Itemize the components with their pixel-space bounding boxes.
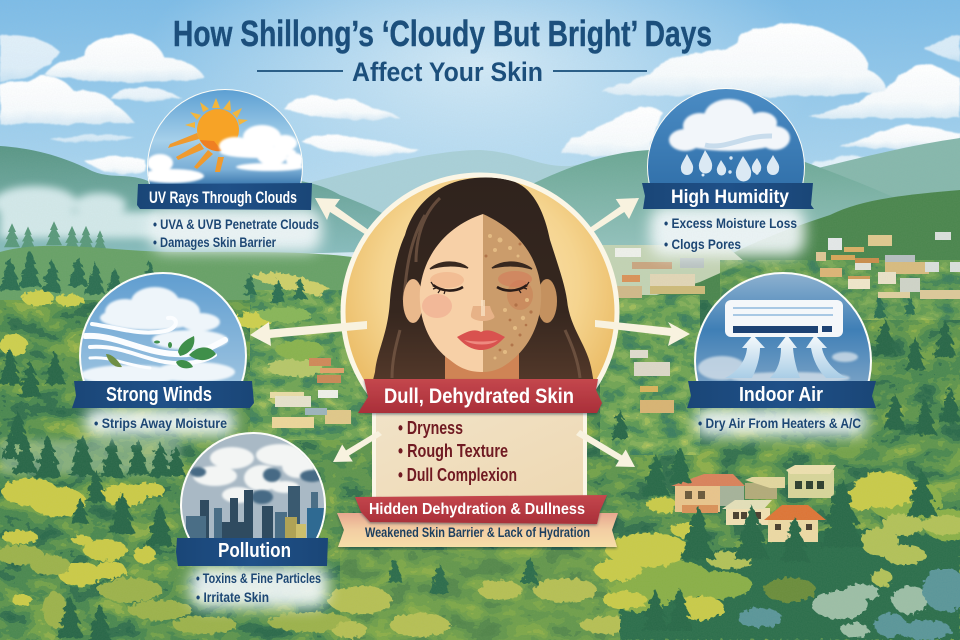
background: hillside forest (0, 190, 960, 640)
panel: pollution (176, 432, 328, 605)
banner: UV Rays Through Clouds (137, 183, 312, 210)
shrubs, bottom centre (328, 578, 640, 638)
bullets: • Clogs Pores (664, 236, 741, 252)
portrait face (372, 177, 594, 384)
banner: weakened skin barrier (337, 513, 618, 547)
bullet: • Dry Air From Heaters & A/C (698, 415, 861, 431)
icon: sun behind clouds (147, 89, 303, 184)
background: mountains (0, 138, 960, 270)
banner: Dull, Dehydrated Skin: Dull, Dehydrated Skin (384, 385, 574, 408)
dark tree line upper left (0, 319, 960, 478)
panel: central symptoms (337, 379, 618, 547)
parchment panel (374, 405, 585, 500)
banner: Indoor Air: Indoor Air (739, 384, 823, 406)
banner: High Humidity (642, 183, 814, 209)
bullets: • Excess Moisture Loss (664, 215, 797, 231)
portrait disc (343, 175, 617, 449)
arrow: centre to indoor air (595, 320, 690, 346)
banner: Pollution: Pollution (218, 540, 291, 562)
background: mist behind captions (85, 206, 867, 608)
panel: central portrait (340, 172, 620, 394)
title (173, 13, 712, 87)
arrow: lower right (576, 430, 635, 467)
background: village left of centre (270, 350, 674, 428)
banner: hidden dehydration: Hidden Dehydration & Dullness (369, 501, 585, 518)
icon: wind and leaves (79, 272, 247, 381)
panel: UV rays through clouds (137, 88, 319, 250)
title: How Shillong’s ‘Cloudy But Bright’ Days (173, 13, 712, 54)
foreground trees in front of houses (641, 447, 938, 631)
arrow: centre to strong winds (250, 321, 367, 346)
background: distant village right (612, 232, 960, 299)
background: foreground foliage (0, 319, 960, 640)
teal-grey shrubs, bottom right (812, 584, 928, 637)
yellow shrubs, left (2, 478, 165, 606)
panel: strong winds (72, 272, 254, 440)
panel: indoor air (687, 272, 876, 431)
far tree lines (4, 221, 106, 251)
banner: Dull, Dehydrated Skin (358, 379, 602, 413)
icon: factory smoke (180, 432, 326, 538)
background: sky (0, 0, 960, 260)
symptom list: • Dryness (398, 418, 463, 438)
arrow: lower left (333, 431, 382, 462)
background: clouds (0, 23, 960, 175)
banner: High Humidity: High Humidity (671, 187, 789, 208)
symptom list: • Rough Texture (398, 441, 508, 461)
shrubs, right (620, 528, 960, 640)
bullets: • Toxins & Fine Particles (196, 570, 321, 586)
banner: Strong Winds: Strong Winds (106, 384, 212, 406)
arrow: centre to high humidity (571, 198, 639, 245)
background: foreground houses (671, 465, 836, 542)
title: Affect Your Skin (352, 57, 543, 87)
panel: high humidity (642, 88, 814, 252)
symptom list (398, 418, 517, 485)
arrow: centre to UV rays (315, 198, 384, 245)
banner: Indoor Air (687, 381, 876, 408)
banner: weakened skin barrier: Weakened Skin Barrier & Lack of Hydration (365, 524, 590, 540)
symptom list: • Dull Complexion (398, 465, 517, 485)
icon: rain cloud (647, 88, 805, 183)
bullets: • Damages Skin Barrier (153, 234, 276, 250)
banner: Strong Winds (72, 381, 254, 408)
banner: UV Rays Through Clouds: UV Rays Through Clouds (149, 188, 297, 207)
bullets: • Irritate Skin (196, 589, 269, 605)
bullets (664, 215, 797, 252)
mist over the left hills (0, 186, 160, 238)
bullets (196, 570, 321, 605)
bullets: • UVA & UVB Penetrate Clouds (153, 216, 319, 232)
dark trees, left (1, 432, 174, 640)
bullets (153, 216, 319, 250)
banner: hidden dehydration (355, 495, 607, 524)
banner: Pollution (176, 538, 328, 566)
icon: air conditioner (694, 272, 872, 381)
bullet: • Strips Away Moisture (94, 415, 227, 431)
